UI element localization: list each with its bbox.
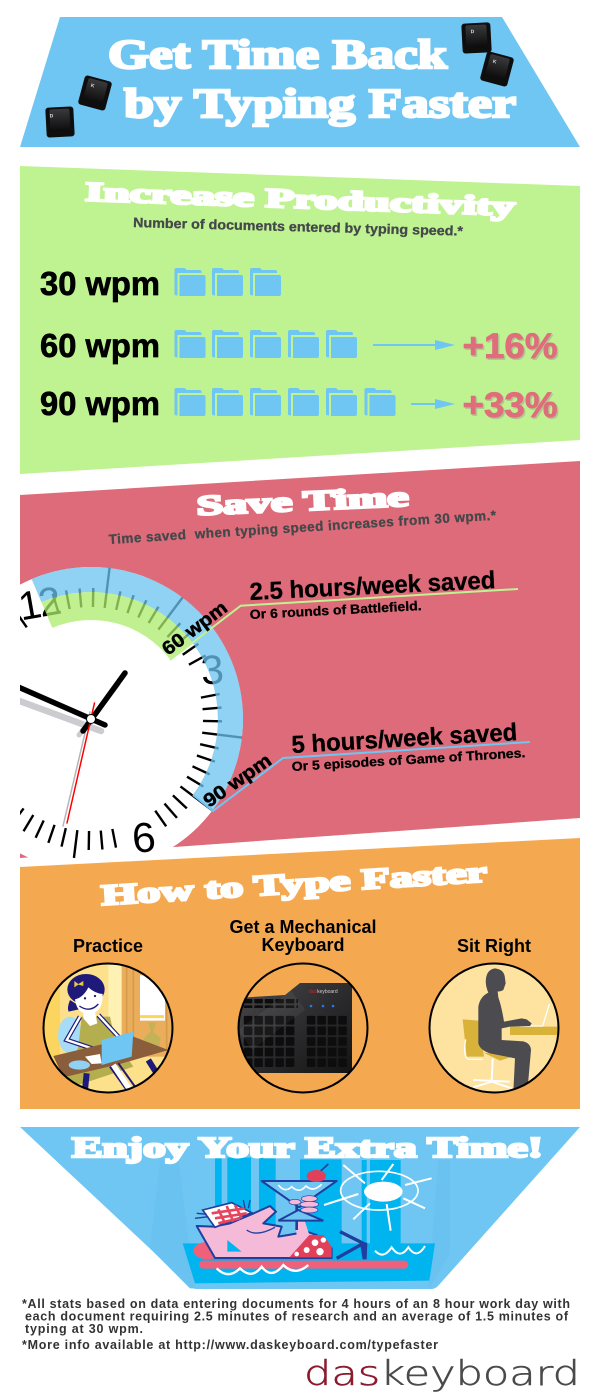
icon: keycap D top: D [471,29,475,35]
footnote: each document requiring 2.5 minutes of research and an average of 1.5 minutes of [25,1310,569,1324]
stat: +33%: +33% [464,388,559,426]
sector: 90 wpm saved [32,567,243,810]
stat: +16%: +16% [462,327,558,366]
row: 90 wpm: 90 wpm [40,385,160,422]
callout: 90 wpm: 90 wpm [200,750,276,812]
label: practice: Practice [73,936,143,956]
illustration: mechanical keyboard: daskeyboard [309,989,338,995]
panel: how to type faster [20,838,580,1109]
callout: 60 wpm: Or 6 rounds of Battlefield. [249,598,422,622]
label: sit right: Sit Right [457,936,531,956]
icon: keycap K top [480,51,514,87]
arrow: 90 wpm [411,399,455,409]
heading: Increase Productivity [85,177,516,222]
panel: enjoy your extra time [20,1127,580,1289]
callout: 60 wpm: 2.5 hours/week saved [249,567,496,606]
illustration: man relaxing with cocktail [150,1158,450,1288]
callout: 60 wpm: 60 wpm [158,597,232,660]
title [108,31,516,126]
panel: increase productivity [20,166,580,474]
illustration: sitting posture [430,964,560,1092]
logo: daskeyboard: das keyboard [304,1354,580,1394]
stat: +33%: +33% [462,386,558,425]
sector: 60 wpm saved [41,592,192,659]
heading: Enjoy Your Extra Time! [72,1132,543,1164]
clock numeral 12: 12 [15,579,63,629]
footnote [22,1297,570,1352]
row: 60 wpm: 60 wpm [40,327,160,364]
footnote: typing at 30 wpm. [25,1322,143,1336]
arrow: 60 wpm [373,340,455,350]
footnote: *All stats based on data entering documents for 4 hours of an 8 hour work day with [22,1297,570,1311]
illustration: woman typing [43,963,175,1093]
subtitle: Number of documents entered by typing speed.* [133,215,464,239]
panel: header banner [20,17,580,147]
clock numeral 3: 3 [199,646,225,694]
clock hands [14,673,125,826]
icon: keycap K left: K [90,83,95,90]
clock numeral 6: 6 [130,813,158,862]
label: mechanical keyboard: Get a Mechanical [229,917,377,937]
clock minute ticks [5,568,242,858]
callout: 60 wpm [158,567,518,660]
label: mechanical keyboard [229,917,377,955]
icon: keycap D top [461,22,492,54]
callout: 90 wpm: Or 5 episodes of Game of Thrones. [291,745,526,774]
icon: keycap D left [45,106,75,138]
row: 30 wpm [40,265,281,302]
icon: keycap K top: K [492,59,497,66]
heading: Save Time [196,482,409,522]
clock [20,567,243,858]
subtitle: Time saved when typing speed increases from 30 wpm.* [108,508,497,547]
callout: 90 wpm: 5 hours/week saved [291,719,518,759]
label: mechanical keyboard: Keyboard [261,935,345,955]
title: by Typing Faster [124,80,516,126]
footnote: *More info available at http://www.daskeyboard.com/typefaster [22,1338,438,1352]
icon: keycap D left: D [50,113,54,120]
row: 30 wpm: 30 wpm [40,265,160,302]
stat: +16%: +16% [464,328,559,368]
row: 90 wpm [40,385,396,422]
icon: keycap K left [78,75,112,111]
panel: save time [0,461,580,871]
callout: 90 wpm [193,719,530,812]
heading: How to Type Faster [100,856,488,912]
row: 60 wpm [40,327,357,364]
title: Get Time Back [108,31,447,77]
illustration: mechanical keyboard [236,964,368,1092]
